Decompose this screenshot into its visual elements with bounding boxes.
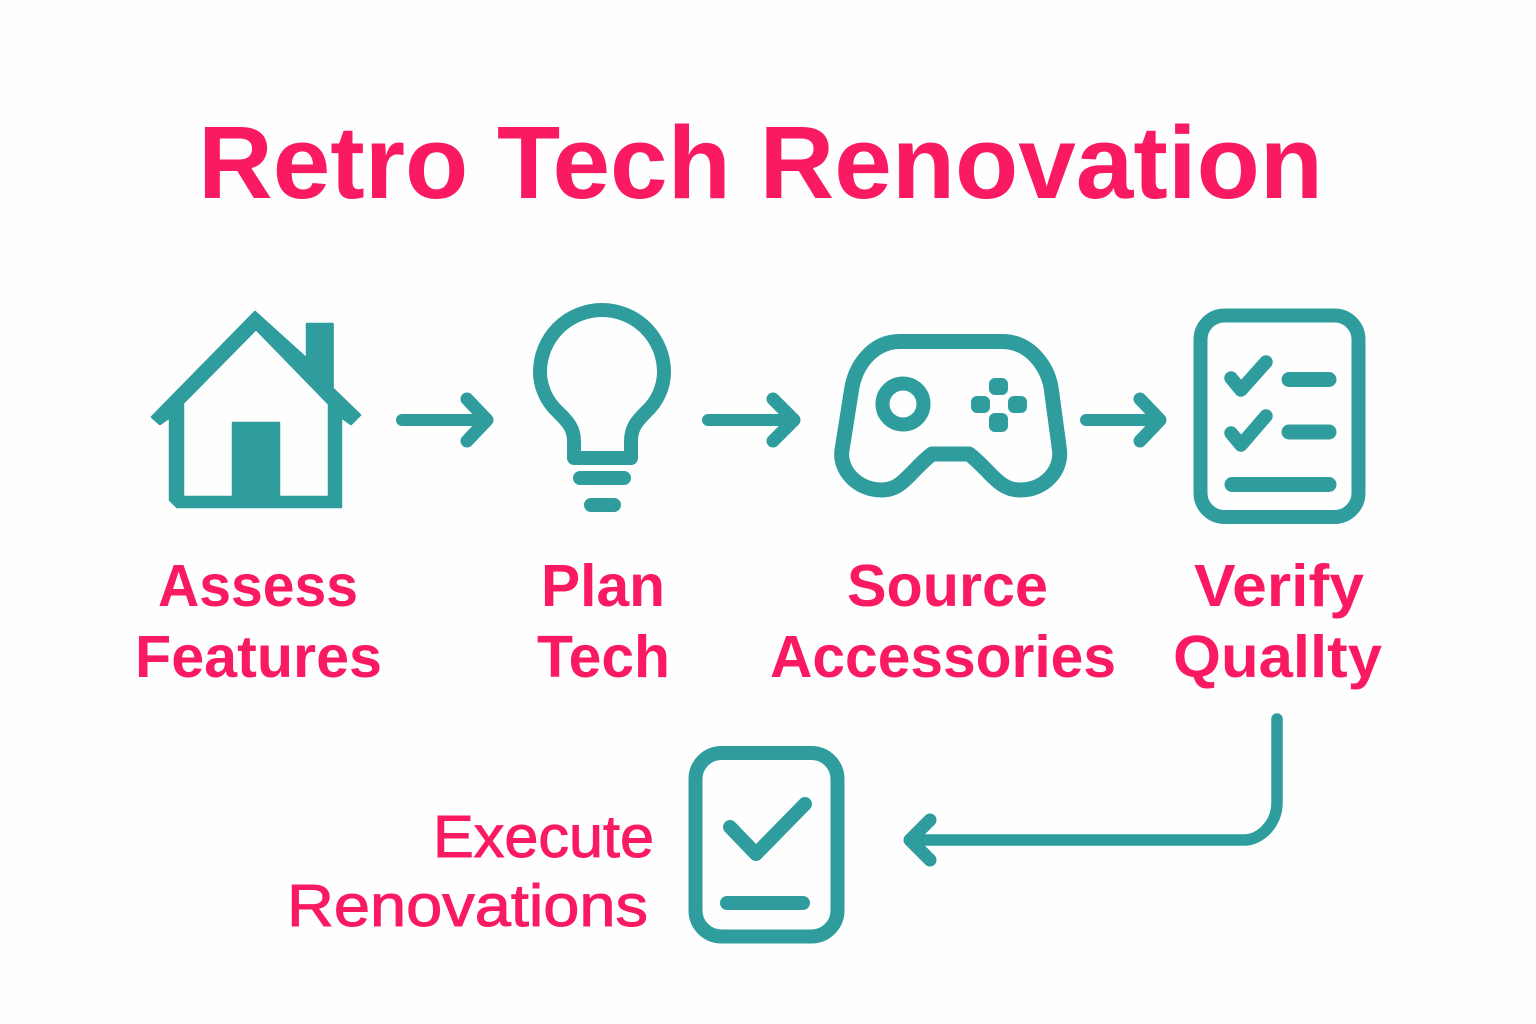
- label: assess features: [135, 553, 382, 690]
- icon: final checklist: [696, 753, 838, 936]
- label: assess features: Features: [135, 624, 382, 690]
- label: plan tech: [537, 553, 670, 690]
- label: source accessories: Accessories: [770, 624, 1116, 690]
- label: assess features: Assess: [158, 553, 358, 619]
- arrow: assess to plan: [402, 399, 487, 441]
- icon: checklist: [1200, 316, 1358, 517]
- label: execute renovations: Renovations: [287, 873, 648, 939]
- arrow: source to verify: [1086, 399, 1160, 441]
- label: verify quality: Quallty: [1173, 624, 1382, 690]
- label: verify quality: Verify: [1194, 553, 1364, 619]
- label: plan tech: Tech: [537, 624, 670, 690]
- label: source accessories: Source: [847, 553, 1048, 619]
- label: execute renovations: Execute: [433, 804, 654, 870]
- title: Retro Tech Renovation: [198, 105, 1323, 220]
- arrow: plan to source: [708, 399, 794, 441]
- icon: light bulb: [540, 310, 664, 505]
- icon: game controller: [842, 342, 1060, 490]
- arrow: verify to execute: [910, 719, 1277, 860]
- label: plan tech: Plan: [541, 553, 665, 619]
- icon: house: [152, 312, 360, 507]
- label: execute renovations: [287, 804, 654, 939]
- label: source accessories: [770, 553, 1116, 690]
- label: verify quality: [1173, 553, 1382, 690]
